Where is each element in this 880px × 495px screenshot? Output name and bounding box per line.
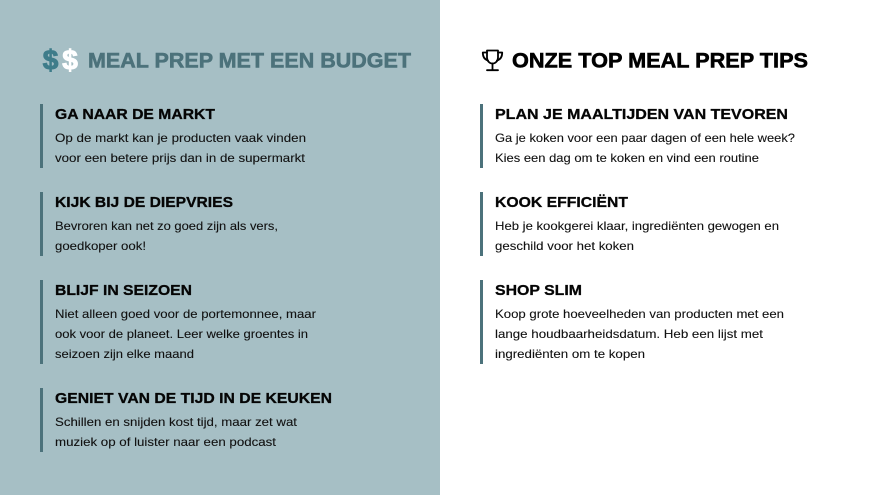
tip: shop slim: Koop grote hoeveelheden van producten met een bbox=[495, 307, 784, 321]
tip: blijf in seizoen: Niet alleen goed voor de portemonnee, maar bbox=[55, 307, 316, 321]
icon: trophy bbox=[483, 50, 502, 70]
tip: plan je maaltijden van tevoren: PLAN JE MAALTIJDEN VAN TEVOREN bbox=[495, 106, 788, 123]
tip: geniet van de tijd in de keuken: GENIET VAN DE TIJD IN DE KEUKEN bbox=[55, 390, 332, 407]
tip: kijk bij de diepvries: goedkoper ook! bbox=[55, 239, 146, 253]
tip: kijk bij de diepvries bbox=[40, 192, 278, 256]
icon: dollar signs bbox=[43, 44, 78, 76]
tip: blijf in seizoen: ook voor de planeet. Leer welke groentes in bbox=[55, 327, 308, 341]
tip: kijk bij de diepvries: KIJK BIJ DE DIEPVRIES bbox=[55, 194, 233, 211]
tip: ga naar de markt bbox=[40, 104, 306, 168]
tip: kook efficiënt: geschild voor het koken bbox=[495, 239, 634, 253]
tip: plan je maaltijden van tevoren: Kies een dag om te koken en vind een routine bbox=[495, 151, 759, 165]
tip: blijf in seizoen bbox=[40, 280, 316, 364]
tip: ga naar de markt: GA NAAR DE MARKT bbox=[55, 106, 215, 123]
icon: dollar signs: $ bbox=[62, 44, 78, 76]
heading: onze top meal prep tips: ONZE TOP MEAL PREP TIPS bbox=[512, 48, 808, 72]
tip: shop slim: SHOP SLIM bbox=[495, 282, 582, 299]
tip: blijf in seizoen: BLIJF IN SEIZOEN bbox=[55, 282, 192, 299]
tip: kook efficiënt: KOOK EFFICIËNT bbox=[495, 194, 628, 211]
tip: geniet van de tijd in de keuken: Schillen en snijden kost tijd, maar zet wat bbox=[55, 415, 298, 429]
tip: plan je maaltijden van tevoren: Ga je koken voor een paar dagen of een hele week? bbox=[495, 131, 795, 145]
tip: kook efficiënt: Heb je kookgerei klaar, ingrediënten gewogen en bbox=[495, 219, 779, 233]
tip: blijf in seizoen: seizoen zijn elke maand bbox=[55, 347, 194, 361]
icon: dollar signs: $ bbox=[43, 44, 59, 76]
tip: shop slim: lange houdbaarheidsdatum. Heb een lijst met bbox=[495, 327, 764, 341]
tip: shop slim: ingrediënten om te kopen bbox=[495, 347, 645, 361]
tip: kook efficiënt bbox=[480, 192, 779, 256]
tip: kijk bij de diepvries: Bevroren kan net zo goed zijn als vers, bbox=[55, 219, 278, 233]
tip: ga naar de markt: Op de markt kan je producten vaak vinden bbox=[55, 131, 306, 145]
heading: meal prep met een budget: MEAL PREP MET EEN BUDGET bbox=[88, 48, 411, 72]
panel: budget background bbox=[0, 0, 440, 495]
tip: shop slim bbox=[480, 280, 784, 364]
tip: ga naar de markt: voor een betere prijs dan in de supermarkt bbox=[55, 151, 306, 165]
tip: geniet van de tijd in de keuken bbox=[40, 388, 332, 452]
tip: plan je maaltijden van tevoren bbox=[480, 104, 795, 168]
tip: geniet van de tijd in de keuken: muziek op of luister naar een podcast bbox=[55, 435, 277, 449]
